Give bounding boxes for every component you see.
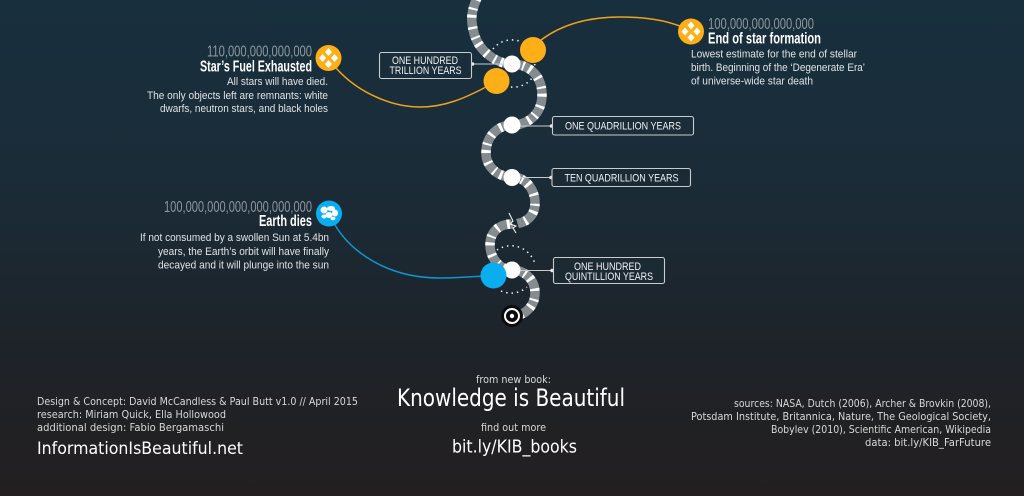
panel: end of star formation: End of star formation (708, 30, 821, 48)
dotted orbit arcs (493, 40, 535, 293)
panel: star's fuel exhausted: All stars will have died. (227, 76, 328, 88)
timeline break mark (509, 213, 518, 234)
book promotion: find out more (481, 421, 546, 434)
label: one hundred quintillion years (520, 258, 664, 284)
panel: end of star formation: birth. Beginning of the ‘Degenerate Era’ (691, 62, 865, 74)
panel: earth dies: years, the Earth’s orbit will have finally (158, 246, 329, 258)
label: ten quadrillion years: TEN QUADRILLION YEARS (564, 172, 678, 184)
marker: earth dies (480, 262, 506, 288)
panel: end of star formation: Lowest estimate for the end of stellar (691, 48, 857, 60)
book promotion: bit.ly/KIB_books (452, 436, 577, 458)
timeline spiral path (472, 0, 542, 316)
panel: star's fuel exhausted: Star’s Fuel Exhausted (200, 58, 312, 76)
sources: Potsdam Institute, Britannica, Nature, The Geological Society, (691, 410, 991, 423)
panel: earth dies: decayed and it will plunge into the sun (158, 260, 329, 272)
book promotion: Knowledge is Beautiful (397, 384, 625, 412)
panel: end of star formation: 100,000,000,000,000 (708, 16, 814, 33)
marker: star's fuel exhausted (484, 68, 510, 94)
credits: Design & Concept: David McCandless & Paul Butt v1.0 // April 2015 (37, 395, 358, 408)
panel: star's fuel exhausted: The only objects left are remnants: white (147, 90, 328, 102)
label: one quadrillion years (520, 116, 694, 135)
panel: earth dies (140, 199, 329, 272)
label: ten quadrillion years (520, 168, 690, 186)
label: one hundred quintillion years: QUINTILLION YEARS (565, 271, 653, 283)
label: one hundred trillion years (380, 52, 505, 78)
credits: InformationIsBeautiful.net (37, 439, 243, 459)
label: one hundred quintillion years: ONE HUNDRED (574, 261, 641, 273)
connector: end of star formation (541, 17, 682, 40)
label: one hundred trillion years: TRILLION YEARS (390, 65, 462, 77)
panel: star's fuel exhausted: dwarfs, neutron stars, and black holes (160, 103, 328, 115)
connector: earth dies (335, 225, 484, 278)
marker: end of star formation (520, 37, 546, 63)
label: one hundred trillion years: ONE HUNDRED (392, 55, 458, 67)
panel: end of star formation (691, 16, 865, 88)
icon: star cluster right (678, 18, 704, 44)
connector: star's fuel exhausted (336, 68, 486, 107)
icon: star cluster left (316, 45, 342, 71)
credits (37, 395, 358, 459)
panel: earth dies: If not consumed by a swollen Sun at 5.4bn (140, 232, 329, 244)
panel: earth dies: 100,000,000,000,000,000,000 (164, 199, 312, 216)
label: one quadrillion years: ONE QUADRILLION YEARS (565, 120, 681, 132)
panel: star's fuel exhausted (147, 44, 328, 115)
panel: end of star formation: of universe-wide star death (691, 76, 813, 88)
timeline end target (501, 305, 523, 327)
panel: star's fuel exhausted: 110,000,000,000,000 (207, 44, 312, 60)
sources: data: bit.ly/KIB_FarFuture (865, 436, 991, 449)
book promotion: from new book: (476, 373, 551, 386)
credits: additional design: Fabio Bergamaschi (37, 421, 224, 434)
credits: research: Miriam Quick, Ella Hollowood (37, 408, 226, 421)
book promotion (397, 373, 625, 458)
sources (691, 397, 991, 449)
icon: earth (316, 200, 342, 226)
timeline nodes (504, 56, 520, 278)
sources: Bobylev (2010), Scientific American, Wikipedia (771, 423, 991, 436)
panel: earth dies: Earth dies (259, 213, 312, 230)
